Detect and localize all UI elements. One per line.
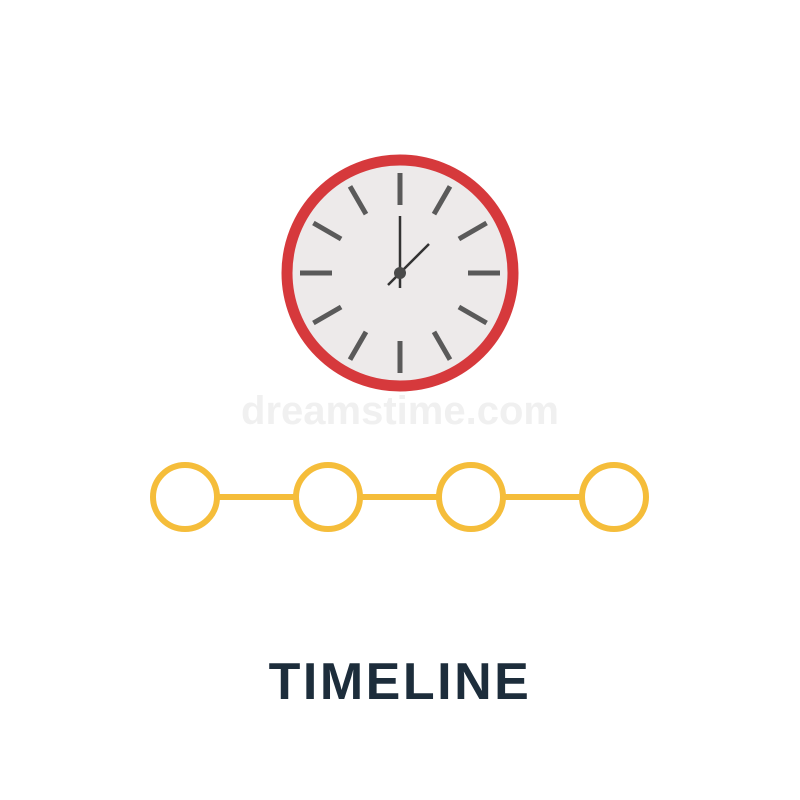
watermark text: dreamstime.com [241,389,559,433]
icon: clock [287,160,513,386]
title: TIMELINE [269,653,531,711]
timeline: nodes and connectors [153,465,646,529]
